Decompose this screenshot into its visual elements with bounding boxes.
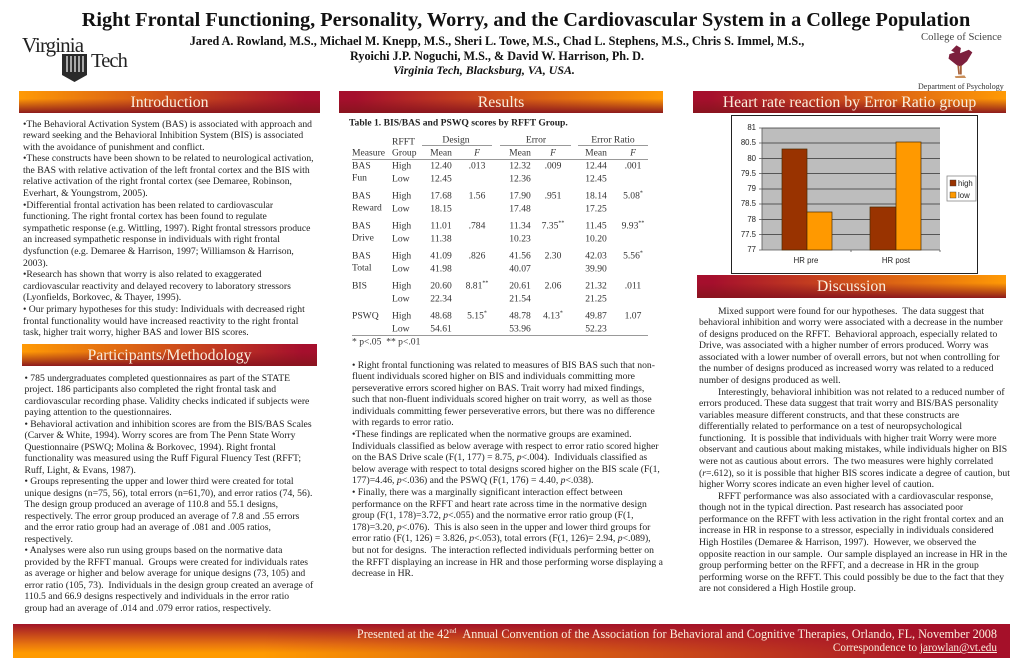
table: BIS/BAS and PSWQ scores: 41.98 <box>430 264 452 274</box>
text: introduction: functioning. The right frontal cortex has been found to regulate <box>23 211 267 222</box>
text: results: on the BAS Drive scale (F(1, 177) = 8.75, p<.004). Individuals classified as <box>352 452 647 463</box>
table: BIS/BAS and PSWQ scores: 17.68 <box>430 190 452 202</box>
chart axis labels: 80 <box>747 154 756 162</box>
table: BIS/BAS and PSWQ scores: 11.01 <box>430 220 452 232</box>
text: discussion: were not as cautious about errors. The two measures were highly correlated <box>699 456 993 467</box>
text: discussion: Drive, was associated with a higher number of errors produced. Worry was <box>699 340 988 351</box>
table: BIS/BAS and PSWQ scores: High <box>392 250 411 262</box>
table: BIS/BAS and PSWQ scores: Error <box>526 134 546 146</box>
text: results: •These findings are replicated when the normative groups are examined. <box>352 429 632 440</box>
text: participants and methodology: cardiovascular recording phase. Validity checks indicated if subjects were <box>24 396 309 406</box>
table: BIS/BAS and PSWQ scores: Mean <box>430 148 452 158</box>
table: BIS/BAS and PSWQ scores: 5.15* <box>467 310 487 322</box>
text: participants and methodology: and the error ratio group had an average of .081 and .005 ratios, <box>24 522 271 533</box>
table: BIS/BAS and PSWQ scores: Drive <box>352 232 374 244</box>
table: BIS/BAS and PSWQ scores: Total <box>352 262 372 274</box>
text: results: error ratio (F(1, 126) = 3.826, p<.053), total errors (F(1, 126)= 2.94, p<.089), <box>352 533 651 544</box>
table: BIS/BAS and PSWQ scores: Low <box>392 324 410 334</box>
text: participants and methodology: project. 186 participants also completed the right frontal task and <box>24 384 276 395</box>
text: discussion: of designs produced on the RFFT. Behavioral approach, especially related to <box>699 329 997 340</box>
table: BIS/BAS and PSWQ scores: 21.25 <box>585 294 607 304</box>
text: discussion: High Hostiles (Demaree & Harrison, 1997). However, we observed the <box>699 537 976 548</box>
heading: Results: Results <box>478 94 524 111</box>
chart axis labels: 81 <box>747 123 756 132</box>
chart axis labels: 80.5 <box>741 138 756 147</box>
heading: Introduction <box>19 91 320 113</box>
text: discussion: (r=.612), so it is possible that higher BIS scores indicate a degree of caution, but <box>699 468 1010 479</box>
text: results: • Right frontal functioning was related to measures of BIS BAS such that non- <box>352 360 655 370</box>
table: BIS/BAS and PSWQ scores: Low <box>392 264 410 274</box>
authors: Jared A. Rowland, M.S., Michael M. Knepp, M.S., Sheri L. Towe, M.S., Chad L. Stephens, M.S., Chris S. Immel, M.S., <box>190 34 804 48</box>
heading: Heart rate reaction: Heart rate reaction by Error Ratio group <box>723 94 976 111</box>
table: BIS/BAS and PSWQ scores: BIS <box>352 280 367 292</box>
affiliation: Virginia Tech, Blacksburg, VA, USA. <box>393 63 575 77</box>
text: introduction: an increased sympathetic response in individuals with right frontal <box>23 234 280 245</box>
logo: College of Science: College of Science <box>921 31 1002 43</box>
text: results: below average with respect to total designs scored higher on the BIS scale (F(1, <box>352 464 660 475</box>
text: participants and methodology: Ruff, Light, & Evans, 1987). <box>24 464 136 476</box>
text: introduction: •Research has shown that worry is also related to exaggerated <box>23 269 262 280</box>
heading: Heart rate reaction <box>693 91 1006 113</box>
table: BIS/BAS and PSWQ scores: 54.61 <box>430 324 452 334</box>
table: BIS/BAS and PSWQ scores: 12.36 <box>509 174 531 184</box>
table: BIS/BAS and PSWQ scores: 10.23 <box>509 234 531 244</box>
table: BIS/BAS and PSWQ scores <box>349 118 648 348</box>
text: introduction: with the avoidance of punishment and conflict. <box>23 142 205 153</box>
table: BIS/BAS and PSWQ scores: High <box>392 310 411 322</box>
table: BIS/BAS and PSWQ scores: 52.23 <box>585 324 607 334</box>
text: participants and methodology: as average or higher and below average for unique designs (73, 105) and <box>24 568 305 579</box>
text: introduction <box>23 118 314 338</box>
text: results: 178)=3.20, p<.076). This is also seen in the upper and lower third groups for <box>352 522 650 533</box>
table: BIS/BAS and PSWQ scores: 5.56* <box>623 250 643 262</box>
table: BIS/BAS and PSWQ scores: Measure <box>352 148 385 158</box>
table: BIS/BAS and PSWQ scores: Design <box>442 134 470 146</box>
text: participants and methodology: paying attention to the questionnaires. <box>24 407 172 418</box>
table: BIS/BAS and PSWQ scores: Mean <box>509 148 531 158</box>
chart axis labels: 79.5 <box>741 168 756 178</box>
table: BIS/BAS and PSWQ scores: 18.14 <box>585 190 607 202</box>
text: results <box>352 360 663 579</box>
table: BIS/BAS and PSWQ scores: 20.61 <box>509 280 531 292</box>
text: introduction: 2003). <box>23 258 48 269</box>
footer: conference note: Presented at the 42nd Annual Convention of the Association for Behavioral and Cognitive Therapies, Orlando, FL, November 2008 <box>357 627 997 641</box>
text: discussion: Interestingly, behavioral inhibition was not related to a reduced number of <box>718 387 1005 398</box>
text: discussion: higher Worry scores indicate an even higher level of caution. <box>699 479 934 490</box>
text: results: perseverative errors scored higher on BAS. Trait worry had mixed findings, <box>352 383 644 394</box>
text: participants and methodology <box>24 372 314 614</box>
table: BIS/BAS and PSWQ scores: Fun <box>352 172 367 184</box>
table: BIS/BAS and PSWQ scores: Group <box>392 148 417 158</box>
text: discussion: behavioral inhibition and worry were associated with a decrease in the number <box>699 317 1003 328</box>
text: participants and methodology: (Carver & White, 1994). Worry scores are from The Penn State Worry <box>24 430 295 441</box>
table: BIS/BAS and PSWQ scores: .011 <box>625 280 641 292</box>
footer: correspondence: Correspondence to jarowlan@vt.edu <box>833 642 997 654</box>
text: introduction: task, higher trait worry, higher BAS and lower BIS scores. <box>23 327 249 338</box>
table: BIS/BAS and PSWQ scores: Low <box>392 234 410 244</box>
text: participants and methodology: • 785 undergraduates completed questionnaires as part of the STATE <box>24 372 290 384</box>
text: discussion: group performing better on the RFFT, and a decrease in HR in the group <box>699 560 979 571</box>
text: participants and methodology: • Groups representing the upper and lower third were created for total <box>24 476 294 487</box>
table footnote: * p<.05 ** p<.01 <box>352 336 420 348</box>
chart axis labels: high <box>958 178 973 188</box>
table: BIS/BAS and PSWQ scores: BAS <box>352 220 371 232</box>
text: discussion: number of designs produced as well. <box>699 375 841 386</box>
table: BIS/BAS and PSWQ scores: 17.90 <box>509 190 531 202</box>
bar chart plot <box>759 128 976 252</box>
table: BIS/BAS and PSWQ scores: 7.35** <box>542 220 564 232</box>
text: discussion: errors produced. These data suggest that trait worry and BIS/BAS personality <box>699 398 998 409</box>
text: discussion: Mixed support were found for our hypotheses. The data suggest that <box>718 306 984 316</box>
text: participants and methodology: functionality was measured using the Ruff Figural Fluency Test (RFFT; <box>24 453 301 464</box>
table: BIS/BAS and PSWQ scores: 12.44 <box>585 160 607 172</box>
logo: College of Science <box>918 31 1004 91</box>
table: BIS/BAS and PSWQ scores: Low <box>392 174 410 184</box>
table: BIS/BAS and PSWQ scores: .784 <box>469 220 485 232</box>
table: BIS/BAS and PSWQ scores: .009 <box>545 160 561 172</box>
table: BIS/BAS and PSWQ scores: .013 <box>469 160 485 172</box>
heading: Results <box>339 91 663 113</box>
table: BIS/BAS and PSWQ scores: 53.96 <box>509 324 531 334</box>
heading: Participants/Methodology <box>22 344 317 366</box>
text: results: decrease in HR. <box>352 568 413 579</box>
text: introduction: •The Behavioral Activation System (BAS) is associated with approach and <box>23 118 312 130</box>
text: results: 177)=4.46, p<.036) and the PSWQ (F(1, 176) = 4.40, p<.038). <box>352 475 593 486</box>
chart axis labels: 78 <box>747 214 756 224</box>
text: discussion: RFFT performance was also associated with a cardiovascular response, <box>718 491 993 502</box>
table: BIS/BAS and PSWQ scores: 18.15 <box>430 204 452 214</box>
heading: Discussion: Discussion <box>817 278 886 295</box>
footer banner <box>13 624 1010 658</box>
text: introduction: • Our primary hypotheses for this study: Individuals with decreased right <box>23 304 305 315</box>
table: BIS/BAS and PSWQ scores: 20.60 <box>430 280 452 292</box>
table: BIS/BAS and PSWQ scores: High <box>392 160 411 172</box>
chart axis labels: 77 <box>747 245 756 254</box>
table: BIS/BAS and PSWQ scores: RFFT <box>392 136 415 148</box>
text: results: with regards to error ratio. <box>352 417 454 428</box>
table: BIS/BAS and PSWQ scores: 4.13* <box>543 310 563 322</box>
text: participants and methodology: 110.5 and 66.9 designs respectively and individuals in the error ratio <box>24 591 289 602</box>
table: BIS/BAS and PSWQ scores: F <box>550 148 556 158</box>
authors: Ryoichi J.P. Noguchi, M.S., & David W. Harrison, Ph. D. <box>350 48 644 62</box>
text: introduction: dysfunction (e.g. Demaree & Harrison, 1997; Williamson & Harrison, <box>23 246 294 257</box>
text: discussion: observant and cautious about making mistakes, while individuals higher on BIS <box>699 444 1007 455</box>
chart axis labels: 77.5 <box>741 230 756 238</box>
table: BIS/BAS and PSWQ scores: Error Ratio <box>591 134 635 146</box>
table: BIS/BAS and PSWQ scores: 12.45 <box>430 174 452 184</box>
text: introduction: frontal functionality would have increased reactivity to the right frontal <box>23 316 298 327</box>
text: discussion: functioning. It is possible that individuals with higher trait Worry were more <box>699 433 997 444</box>
text: introduction: reward seeking and the Behavioral Inhibition System (BIS) is associated <box>23 130 303 141</box>
table: BIS/BAS and PSWQ scores: 2.06 <box>545 280 561 292</box>
table: BIS/BAS and PSWQ scores: 8.81** <box>466 280 488 292</box>
text: introduction: Everhart, & Youngstrom, 2005). <box>23 188 148 199</box>
table: BIS/BAS and PSWQ scores: 10.20 <box>585 234 607 244</box>
table: BIS/BAS and PSWQ scores: PSWQ <box>352 310 379 322</box>
table: BIS/BAS and PSWQ scores: 11.34 <box>509 220 531 232</box>
text: discussion: though not in the typical direction. Past research has associated poor <box>699 502 963 513</box>
chart axis labels <box>741 123 973 265</box>
chart: heart rate by error ratio group <box>731 115 978 274</box>
table: BIS/BAS and PSWQ scores: Reward <box>352 202 382 214</box>
text: participants and methodology: respectively. The error group produced an average of 7.8 and .55 errors <box>24 510 299 522</box>
table: BIS/BAS and PSWQ scores: 12.32 <box>509 160 531 172</box>
text: introduction: •Differential frontal activation has been related to cardiovascular <box>23 200 273 211</box>
table: BIS/BAS and PSWQ scores: 9.93** <box>622 220 644 232</box>
table: BIS/BAS and PSWQ scores: .826 <box>469 250 485 262</box>
table: BIS/BAS and PSWQ scores: High <box>392 280 411 292</box>
table: BIS/BAS and PSWQ scores: 22.34 <box>430 294 452 304</box>
table: BIS/BAS and PSWQ scores: High <box>392 220 411 232</box>
table: BIS/BAS and PSWQ scores: 49.87 <box>585 310 607 322</box>
table: BIS/BAS and PSWQ scores: BAS <box>352 250 371 262</box>
table: BIS/BAS and PSWQ scores: Mean <box>585 148 607 158</box>
text: discussion: variables measure different constructs, and that these constructs are <box>699 410 959 421</box>
table: BIS/BAS and PSWQ scores: 48.68 <box>430 310 452 322</box>
text: discussion: increase in HR in response to a stressor, especially in individuals considered <box>699 525 994 536</box>
table: BIS/BAS and PSWQ scores: 17.25 <box>585 204 607 214</box>
table: BIS/BAS and PSWQ scores: 40.07 <box>509 264 531 274</box>
table: BIS/BAS and PSWQ scores: 5.08* <box>623 190 643 202</box>
table: BIS/BAS and PSWQ scores: 12.45 <box>585 174 607 184</box>
title: Right Frontal Functioning, Personality, Worry, and the Cardiovascular System in a College Population <box>82 9 970 31</box>
table: BIS/BAS and PSWQ scores: .951 <box>545 190 561 202</box>
text: participants and methodology: • Behavioral activation and inhibition scores are from the BIS/BAS Scales <box>24 418 312 430</box>
text: introduction: (Lyonfields, Borkovec, & Thayer, 1995). <box>23 292 181 303</box>
chart axis labels: 78.5 <box>741 199 756 208</box>
table: BIS/BAS and PSWQ scores: 11.38 <box>430 234 452 244</box>
table: BIS/BAS and PSWQ scores: 21.32 <box>585 280 607 292</box>
text: discussion: the number of designs produced as increased worry was related to a reduced <box>699 363 993 374</box>
text: results: performance on the RFFT and heart rate across time in the normative design <box>352 499 647 510</box>
logo: College of Science: Department of Psychology <box>918 82 1004 91</box>
table: BIS/BAS and PSWQ scores: Low <box>392 204 410 214</box>
text: discussion: opposite reaction in our sample. Our sample displayed an increase in HR in the <box>699 549 1007 560</box>
text: discussion: associated with a lower number of overall errors, but not when controlling for <box>699 352 1000 363</box>
text: introduction: •These constructs have been shown to be related to neurological activation, <box>23 153 314 164</box>
table: BIS/BAS and PSWQ scores: 41.56 <box>509 250 531 262</box>
text: results: such that non-fluent individuals scored higher on trait worry, as well as those <box>352 394 652 405</box>
text: participants and methodology: respectively. <box>24 534 73 544</box>
table: BIS/BAS and PSWQ scores: 48.78 <box>509 310 531 322</box>
text: participants and methodology: provided by the RFFT manual. Groups were created for individuals rates <box>24 556 308 568</box>
table: BIS/BAS and PSWQ scores: Low <box>392 294 410 304</box>
table: BIS/BAS and PSWQ scores: .001 <box>625 160 641 172</box>
table: BIS/BAS and PSWQ scores: 42.03 <box>585 250 607 262</box>
table: BIS/BAS and PSWQ scores: 1.07 <box>625 310 641 322</box>
text: participants and methodology: The design group produced an average of 110.8 and 55.1 designs, <box>24 499 278 510</box>
text: participants and methodology: error ratio (105, 73). Individuals in the design group created an average of <box>24 580 313 590</box>
text: introduction: relative activation of the right frontal cortex (see Demaree, Robinson, <box>23 176 292 187</box>
text: results: • Finally, there was a marginally significant interaction effect between <box>352 487 623 498</box>
table: BIS/BAS and PSWQ scores: 12.40 <box>430 160 452 172</box>
logo: Virginia Tech: Virginia <box>22 33 83 57</box>
heading: Discussion <box>697 275 1006 298</box>
table: BIS/BAS and PSWQ scores: High <box>392 190 411 202</box>
text: participants and methodology: group had an average of .014 and .079 error ratios, respectively. <box>24 602 271 614</box>
table: BIS/BAS and PSWQ scores: 41.09 <box>430 250 452 262</box>
table: BIS/BAS and PSWQ scores: F <box>630 148 636 158</box>
text: discussion: differentially related to performance on a test of neuropsychological <box>699 421 962 432</box>
table: BIS/BAS and PSWQ scores: 39.90 <box>585 264 607 274</box>
table: BIS/BAS and PSWQ scores: 1.56 <box>469 190 485 202</box>
text: introduction: cardiovascular reactivity and delayed recovery to laboratory stressors <box>23 281 291 292</box>
text: results: group (F(1, 178)=3.72, p<.055) and the normative error ratio group (F(1, <box>352 510 633 521</box>
table title: Table 1. BIS/BAS and PSWQ scores by RFFT Group. <box>349 118 568 128</box>
table: BIS/BAS and PSWQ scores: 2.30 <box>545 250 561 262</box>
chart axis labels: 79 <box>747 184 756 193</box>
authors <box>190 34 804 62</box>
text: results: fluent individuals scored higher on BIS and individuals committing more <box>352 371 635 382</box>
text: results: but not for designs. The interaction reflected individuals performing better on <box>352 545 654 556</box>
heading: Introduction: Introduction <box>130 94 209 111</box>
table: BIS/BAS and PSWQ scores: 11.45 <box>585 220 607 232</box>
chart axis labels: low <box>958 190 970 200</box>
text: introduction: the BAS with relative activation of the left frontal cortex and the BIS with <box>23 165 310 176</box>
table: BIS/BAS and PSWQ scores: F <box>474 148 480 158</box>
table: BIS/BAS and PSWQ scores: 17.48 <box>509 204 531 214</box>
text: discussion <box>699 306 1010 594</box>
logo: Virginia Tech <box>22 33 128 82</box>
chart axis labels: HR pre <box>794 256 818 265</box>
text: results: individuals committing fewer perseverative errors, but there was no difference <box>352 406 655 417</box>
text: participants and methodology: unique designs (n=75, 56), total errors (n=61,70), and error ratios (74, 56). <box>24 488 312 498</box>
text: introduction: sympathetic response (e.g. Wittling, 1997). Right frontal stressors produce <box>23 223 310 234</box>
logo: Virginia Tech: Tech <box>91 50 127 72</box>
text: discussion: are not considered a High Hostile group. <box>699 583 856 594</box>
text: participants and methodology: • Analyses were also run using groups based on the normative data <box>24 545 282 556</box>
heading: Participants/Methodology: Participants/Methodology <box>87 347 252 364</box>
text: discussion: performance on the RFFT with less activation in the right frontal cortex and an <box>699 514 1004 525</box>
text: discussion: performing worse on the RFFT. This could possibly be due to the fact that they <box>699 572 1004 583</box>
table: BIS/BAS and PSWQ scores: BAS <box>352 160 371 172</box>
table: BIS/BAS and PSWQ scores: 21.54 <box>509 294 531 304</box>
text: results: the RFFT displaying an increase in HR and those performing worse displaying a <box>352 557 663 568</box>
text: participants and methodology: Questionnaire (PSWQ; Molina & Borkovec, 1994). Right frontal <box>24 442 276 452</box>
chart axis labels: HR post <box>882 256 910 265</box>
table: BIS/BAS and PSWQ scores: BAS <box>352 190 371 202</box>
text: results: Individuals classified as below average with respect to error ratio scored higher <box>352 441 658 452</box>
